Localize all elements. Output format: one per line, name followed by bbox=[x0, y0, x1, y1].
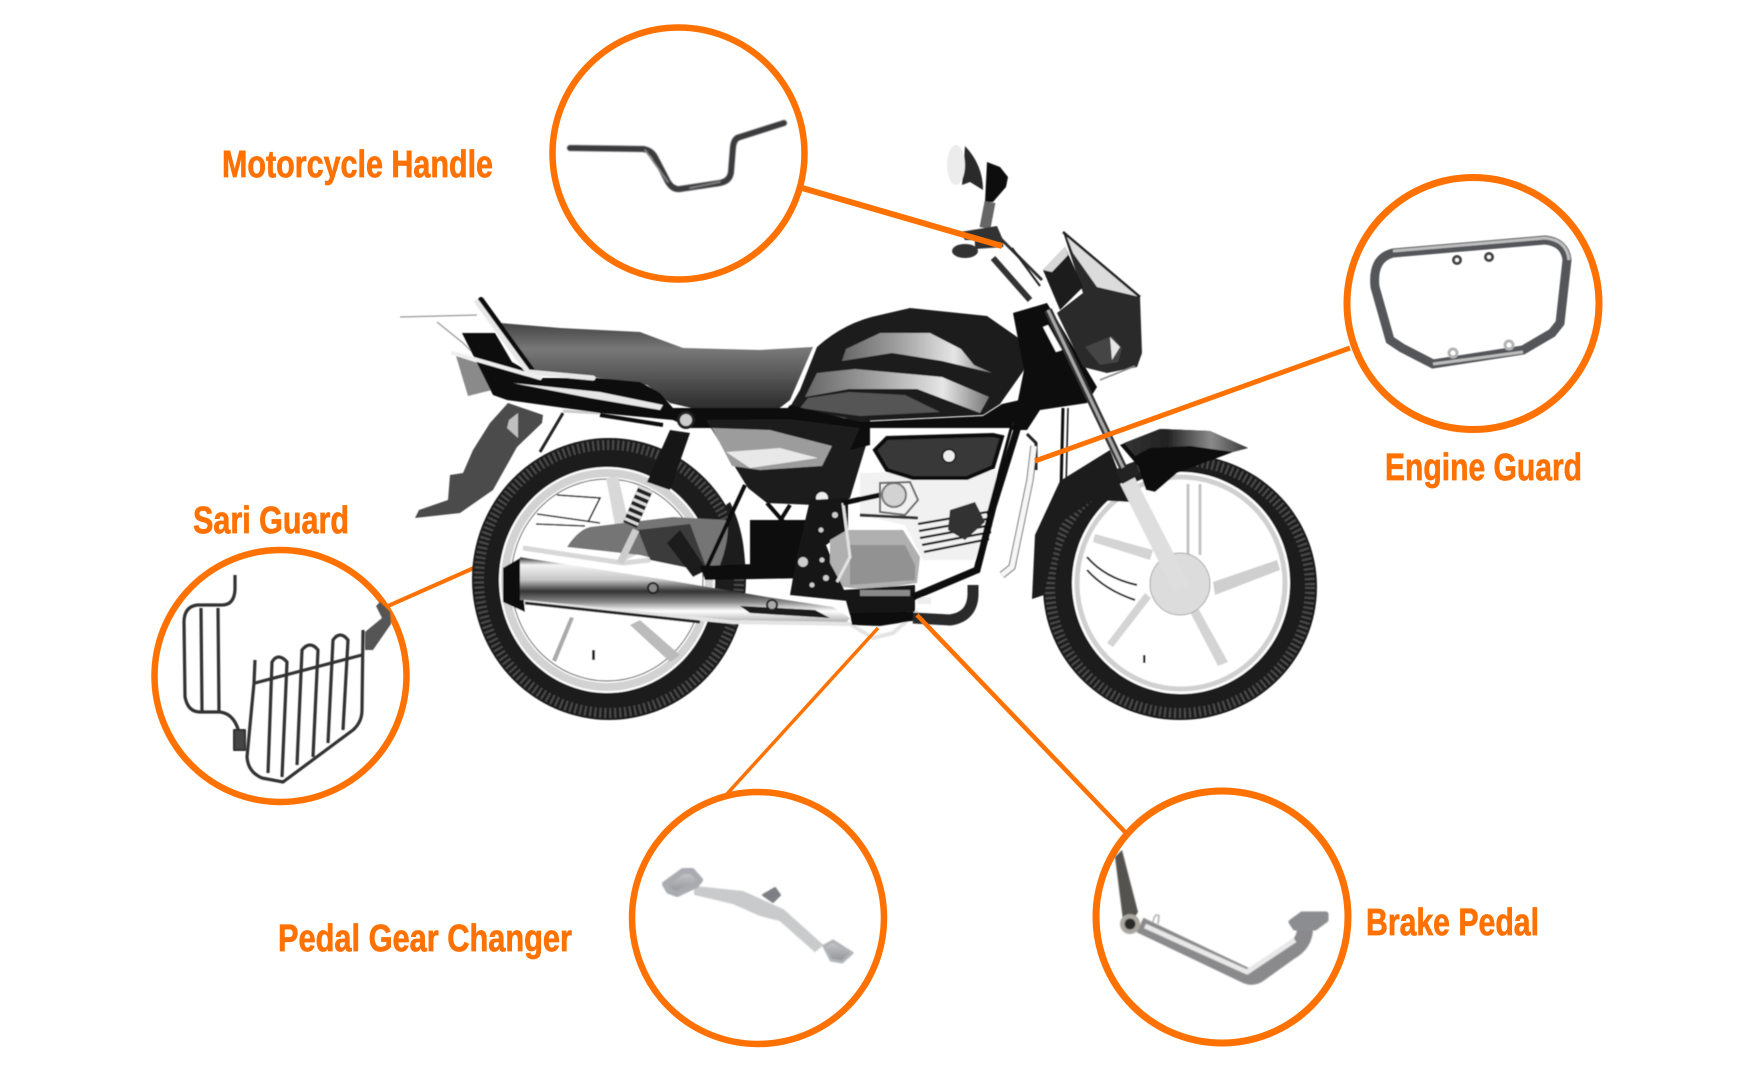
battery cover bbox=[875, 435, 1002, 478]
panel: engine guard bbox=[1347, 178, 1599, 430]
icon: handlebar bbox=[570, 123, 784, 189]
leader line: engine guard bbox=[1035, 348, 1350, 461]
rear shock absorber bbox=[620, 412, 694, 563]
chrome rails bbox=[453, 300, 593, 378]
side panel bbox=[706, 418, 870, 506]
seat bbox=[500, 323, 813, 410]
steering head bbox=[1012, 303, 1097, 430]
heading: engine guard: Engine Guard bbox=[1385, 447, 1582, 489]
tail light bbox=[456, 356, 492, 396]
heading: pedal gear changer: Pedal Gear Changer bbox=[278, 918, 572, 960]
panel: motorcycle handle bbox=[552, 28, 804, 280]
heading: sari guard: Sari Guard bbox=[193, 500, 349, 542]
headlight cowl bbox=[1043, 232, 1142, 380]
rear reflector bbox=[507, 413, 518, 438]
tail panel bbox=[462, 333, 800, 428]
rear wheel bbox=[472, 438, 746, 720]
front fork bbox=[1048, 310, 1190, 592]
muffler bbox=[503, 557, 918, 638]
heading: motorcycle handle: Motorcycle Handle bbox=[222, 144, 493, 186]
heading: brake pedal: Brake Pedal bbox=[1366, 902, 1539, 944]
engine bbox=[790, 470, 997, 615]
leader line: brake pedal bbox=[917, 615, 1125, 832]
frame and exhaust pipe bbox=[913, 377, 1068, 620]
frame strip under tank bbox=[780, 400, 1020, 450]
mirrors bbox=[947, 145, 1008, 228]
front wheel bbox=[1043, 454, 1317, 720]
icon: sari guard bbox=[184, 575, 391, 782]
handlebar on bike bbox=[952, 226, 1042, 300]
swing arm and chain guard bbox=[523, 485, 815, 580]
panel: brake pedal bbox=[1096, 791, 1348, 1043]
fuel tank bbox=[790, 308, 1024, 421]
icon: brake pedal bbox=[1115, 850, 1326, 977]
fender stay bbox=[540, 411, 663, 452]
rear mudguard bbox=[415, 403, 543, 518]
icon: gear pedal bbox=[665, 871, 852, 962]
battery cover knob bbox=[942, 450, 956, 462]
motorcycle bbox=[400, 145, 1317, 720]
bracket bbox=[365, 602, 391, 650]
panel: pedal gear changer bbox=[632, 792, 884, 1044]
icon: engine guard bbox=[1375, 238, 1569, 364]
leader line: pedal gear changer bbox=[726, 628, 878, 795]
luggage rack bbox=[400, 315, 480, 360]
leader line: sari guard bbox=[388, 508, 607, 606]
panel: sari guard bbox=[154, 550, 406, 802]
engine guard bar on bike bbox=[1002, 434, 1036, 575]
leader line: motorcycle handle bbox=[802, 188, 1002, 246]
front fender bbox=[1032, 429, 1248, 599]
